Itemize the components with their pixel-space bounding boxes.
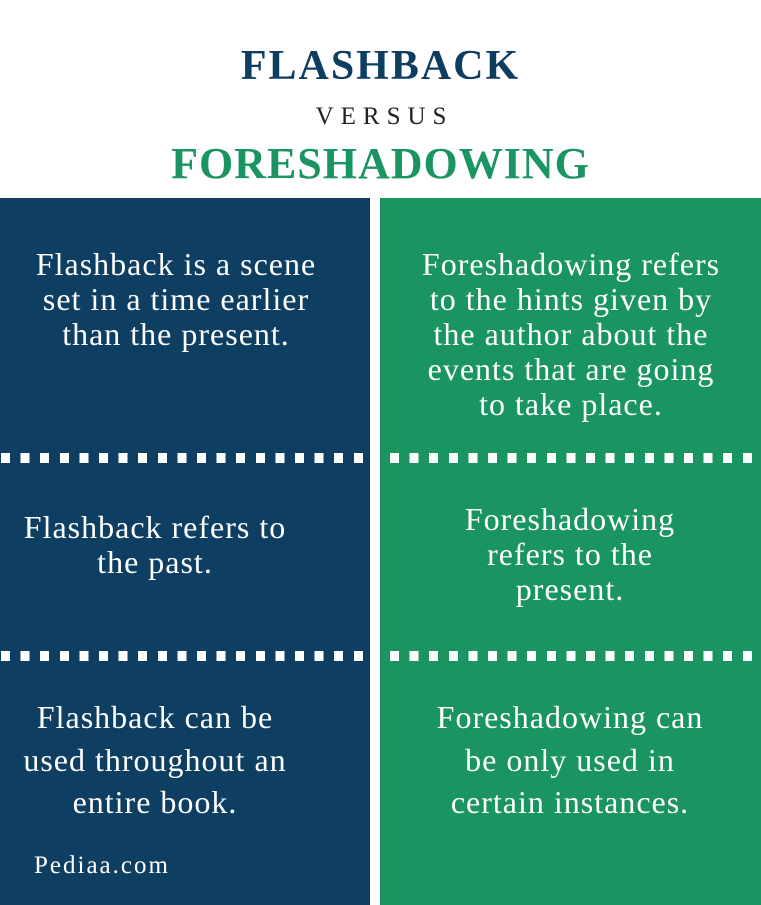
title: versus: VERSUS <box>316 103 453 130</box>
text: flashback usage: used throughout an <box>23 742 287 778</box>
text: foreshadowing time <box>465 501 675 607</box>
text: foreshadowing definition: the author about the <box>433 316 709 352</box>
text: flashback time: the past. <box>97 544 213 580</box>
text: foreshadowing definition <box>422 246 720 422</box>
text: flashback definition <box>36 246 316 352</box>
text: flashback usage: Flashback can be <box>37 699 273 735</box>
text: foreshadowing usage: certain instances. <box>451 784 689 820</box>
text: flashback definition: set in a time earlier <box>43 281 309 317</box>
text: foreshadowing usage: Foreshadowing can <box>437 699 703 735</box>
text: flashback time <box>24 509 286 580</box>
text: flashback usage: entire book. <box>73 784 237 820</box>
text: foreshadowing time: present. <box>516 571 624 607</box>
text: foreshadowing usage <box>437 699 703 820</box>
title: flashback: FLASHBACK <box>241 43 520 89</box>
panel: foreshadowing <box>380 198 761 905</box>
panel: flashback <box>0 198 370 905</box>
logo: Pediaa.com <box>34 852 170 879</box>
text: foreshadowing time: Foreshadowing <box>465 501 675 537</box>
text: foreshadowing definition: Foreshadowing refers <box>422 246 720 282</box>
text: flashback time: Flashback refers to <box>24 509 286 545</box>
divider dots right 1 <box>390 453 761 463</box>
text: foreshadowing definition: to take place. <box>479 386 663 422</box>
text: flashback definition: than the present. <box>62 316 290 352</box>
text: foreshadowing definition: events that are going <box>428 351 714 387</box>
divider dots left 1 <box>1 453 363 463</box>
text: flashback definition: Flashback is a scene <box>36 246 316 282</box>
text: foreshadowing time: refers to the <box>487 536 653 572</box>
text: foreshadowing usage: be only used in <box>465 742 675 778</box>
text: foreshadowing definition: to the hints given by <box>430 281 712 317</box>
divider dots left 2 <box>1 651 363 661</box>
divider dots right 2 <box>390 651 761 661</box>
title: foreshadowing: FORESHADOWING <box>171 139 590 188</box>
text: flashback usage <box>23 699 287 820</box>
